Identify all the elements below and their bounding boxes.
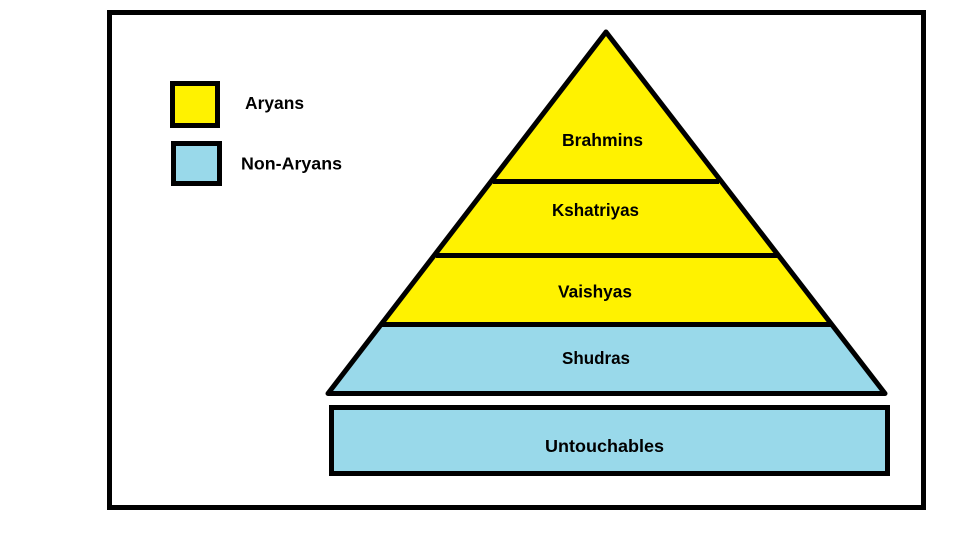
pyramid outline bbox=[328, 32, 885, 394]
tier: Vaishyas: Vaishyas bbox=[558, 282, 632, 302]
tier: Kshatriyas bbox=[436, 182, 778, 256]
caste pyramid bbox=[328, 32, 885, 394]
legend label: Aryans: Aryans bbox=[245, 93, 304, 113]
tier: Kshatriyas: Kshatriyas bbox=[552, 200, 639, 220]
tier: Brahmins: Brahmins bbox=[562, 130, 643, 150]
legend label: Non-Aryans: Non-Aryans bbox=[241, 154, 342, 174]
base: Untouchables: Untouchables bbox=[545, 436, 664, 456]
legend bbox=[172, 84, 342, 184]
tier: Shudras bbox=[328, 324, 885, 394]
legend swatch: Non-Aryans bbox=[174, 144, 220, 184]
tier: Vaishyas bbox=[382, 256, 832, 324]
outer frame bbox=[110, 12, 924, 508]
tier: Brahmins bbox=[493, 32, 719, 182]
legend swatch: Aryans bbox=[172, 84, 218, 126]
tier: Shudras: Shudras bbox=[562, 348, 630, 368]
base: Untouchables bbox=[332, 408, 888, 474]
